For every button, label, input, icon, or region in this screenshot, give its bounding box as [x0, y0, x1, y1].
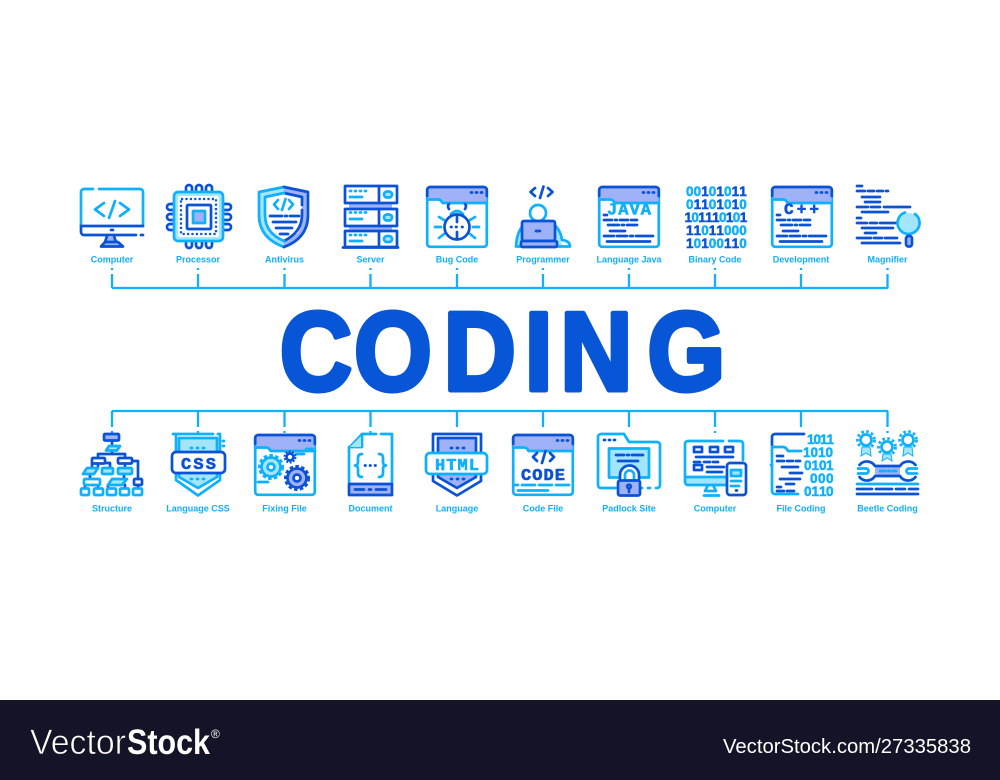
- icon: binary code: [684, 184, 748, 251]
- icon: java window: [599, 187, 659, 247]
- icon: code file window: [513, 435, 573, 495]
- icon: file coding: [771, 432, 834, 499]
- icon: binary code: 11011000: [686, 223, 747, 238]
- java code lettering: JAVA: [607, 202, 652, 220]
- icon: bug code window: [427, 187, 487, 247]
- css lettering: CSS: [181, 456, 216, 475]
- footer logo: ®: [211, 727, 220, 741]
- label: Bug Code: Bug Code: [436, 254, 478, 264]
- top connector tree: [112, 268, 888, 288]
- html lettering: HTML: [435, 457, 479, 476]
- icon: binary code: 00101011: [686, 184, 747, 199]
- label: Fixing File: Fixing File: [262, 504, 307, 514]
- code lettering: CODE: [521, 467, 565, 486]
- icon: structure tree: [81, 434, 142, 495]
- icon: binary code: 10100110: [686, 236, 747, 251]
- icon: padlock site: [598, 434, 660, 496]
- binary digits: 0110: [804, 484, 834, 499]
- icon: computer: [81, 189, 143, 246]
- footer logo: Stock: [127, 723, 210, 762]
- label: Antivirus: Antivirus: [265, 254, 304, 264]
- label: Processor: Processor: [176, 254, 221, 264]
- title: CODING: [280, 290, 725, 414]
- icon: document: [349, 434, 392, 495]
- icon: binary code: 01101010: [686, 197, 747, 212]
- label: Computer: Computer: [91, 254, 134, 264]
- binary digits: 1010: [803, 445, 833, 460]
- icon: fixing file window: [255, 435, 315, 495]
- label: Magnifier: Magnifier: [867, 254, 908, 264]
- label: Structure: Structure: [92, 504, 132, 514]
- label: Server: Server: [356, 254, 385, 264]
- label: Document: Document: [348, 504, 393, 514]
- icon: development window: [772, 187, 832, 247]
- icon: binary code: 101110101: [684, 210, 748, 225]
- footer bar: [0, 700, 1000, 780]
- footer image id: VectorStock.com/27335838: [723, 736, 971, 758]
- icon: html shield: [426, 434, 487, 496]
- icon: magnifier: [857, 186, 921, 246]
- binary digits: 1011: [807, 432, 834, 447]
- bottom connector tree: [112, 411, 888, 433]
- icon: programmer: [516, 186, 570, 247]
- label: File Coding: File Coding: [776, 504, 826, 514]
- label: Computer: Computer: [694, 504, 737, 514]
- icon: processor: [167, 185, 231, 248]
- c++ lettering: C++: [784, 201, 819, 219]
- label: Beetle Coding: Beetle Coding: [857, 504, 918, 514]
- icon: server: [343, 186, 398, 248]
- label: Code File: Code File: [523, 504, 563, 514]
- binary digits: [803, 432, 834, 499]
- label: Padlock Site: Padlock Site: [602, 504, 656, 514]
- footer logo: [30, 723, 220, 762]
- label: Programmer: Programmer: [516, 254, 570, 264]
- label: Language: Language: [436, 504, 478, 514]
- icon: css shield: [172, 434, 225, 496]
- binary digits: 000: [810, 471, 834, 486]
- icon: beetle coding wrench: [857, 432, 918, 494]
- label: Binary Code: Binary Code: [688, 254, 742, 264]
- label: Language CSS: Language CSS: [166, 504, 230, 514]
- label: Language Java: Language Java: [596, 254, 663, 264]
- label: Development: Development: [773, 254, 829, 264]
- icon: antivirus shield: [259, 187, 308, 247]
- icon: responsive computer: [685, 441, 746, 496]
- binary digits: 0101: [804, 458, 834, 473]
- footer logo: Vector: [30, 723, 126, 762]
